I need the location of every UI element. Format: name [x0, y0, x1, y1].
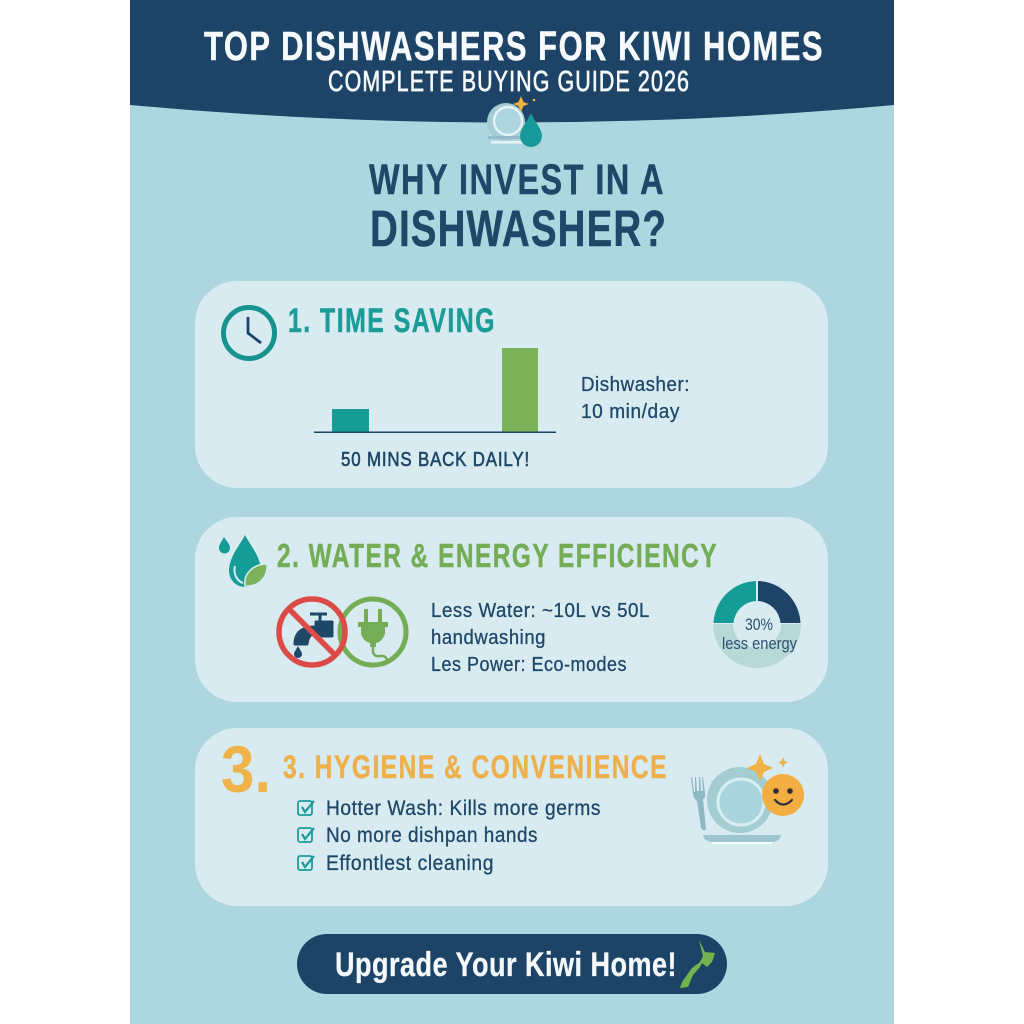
bar chart [314, 348, 556, 433]
title: TOP DISHWASHERS FOR KIWI HOMES [204, 23, 824, 69]
section heading [369, 156, 667, 257]
check item 2: No more dishpan hands [326, 824, 538, 847]
icon: plate, fork and smiley [691, 754, 804, 844]
call to action button [297, 934, 727, 994]
panel: time saving [195, 281, 828, 488]
dishwasher time label: 10 min/day [581, 401, 680, 423]
water and power text: Les Power: Eco-modes [431, 654, 627, 676]
icon: plate and water drop [487, 96, 542, 147]
heading: hygiene and convenience: 3. HYGIENE & CONVENIENCE [283, 749, 668, 785]
icon: water drop and leaf [219, 535, 267, 587]
water and power text: handwashing [431, 627, 546, 649]
subtitle: COMPLETE BUYING GUIDE 2026 [328, 66, 690, 98]
water and power text: Less Water: ~10L vs 50L [431, 600, 650, 622]
donut chart: 30% less energy: less energy [722, 634, 797, 653]
dishwasher time label: Dishwasher: [581, 374, 690, 396]
icon: crossed-out tap [279, 599, 345, 665]
icon: plug in circle [340, 599, 406, 665]
donut chart: 30% less energy: 30% [745, 615, 773, 634]
icon: clock [224, 308, 274, 358]
dishwasher time label [581, 374, 690, 423]
panel: water and energy [195, 517, 828, 702]
check item 1: Hotter Wash: Kills more germs [326, 797, 601, 820]
chart caption: 50 MINS BACK DAILY! [341, 449, 530, 471]
section heading: WHY INVEST IN A [369, 156, 665, 204]
water and power text [431, 600, 650, 676]
heading: time saving: 1. TIME SAVING [288, 302, 496, 340]
section heading: DISHWASHER? [370, 200, 667, 257]
panel: hygiene and convenience [195, 728, 828, 906]
header banner [130, 0, 894, 122]
page background [130, 0, 894, 1024]
heading: water and energy: 2. WATER & ENERGY EFFICIENCY [277, 537, 718, 574]
checklist [298, 797, 601, 875]
call to action button: Upgrade Your Kiwi Home! [335, 946, 677, 984]
icon: New Zealand map [680, 940, 715, 988]
big number 3: 3. [221, 732, 271, 806]
check item 3: Effontlest cleaning [326, 852, 494, 875]
donut chart: 30% less energy [713, 581, 801, 668]
